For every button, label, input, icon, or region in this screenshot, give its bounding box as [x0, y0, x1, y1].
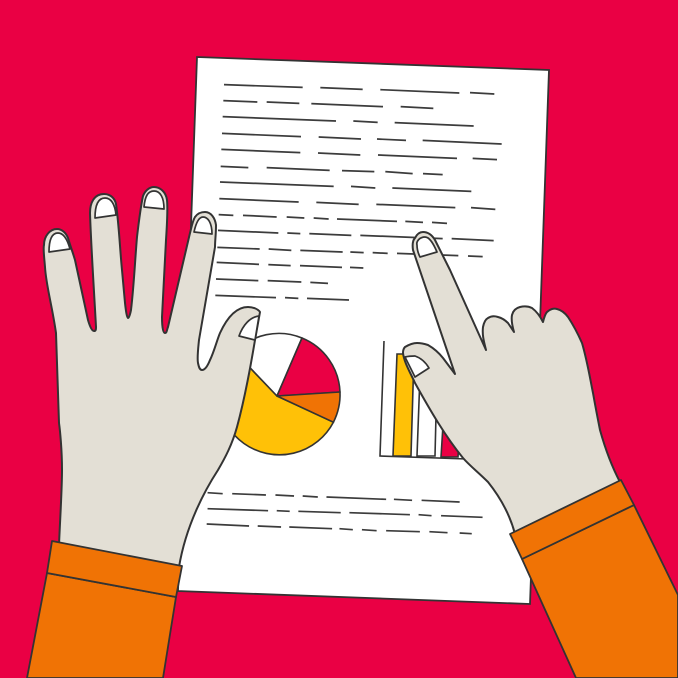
- cuff: [510, 480, 634, 559]
- sleeve body: [522, 505, 678, 678]
- right sleeve: [510, 480, 678, 678]
- panel: paper document: [178, 57, 549, 604]
- nail: thumb: [405, 356, 429, 377]
- left sleeve: [27, 541, 182, 678]
- text block: upper lines: [215, 85, 502, 300]
- bar chart: [380, 341, 467, 459]
- cuff: [47, 541, 182, 597]
- text block: lower lines: [207, 493, 483, 534]
- nail: middle finger: [144, 191, 164, 209]
- bar: white: [417, 375, 437, 456]
- left hand outline: [44, 187, 260, 567]
- pie slice: white: [235, 333, 302, 396]
- sleeve body: [27, 573, 176, 678]
- pie slice: red: [277, 338, 340, 396]
- bar: red: [441, 425, 460, 457]
- icon: left hand: [44, 187, 260, 567]
- pie slice: yellow: [218, 352, 333, 455]
- icon: right hand: [403, 232, 620, 534]
- nail: pinky: [49, 233, 70, 252]
- pie chart: [218, 333, 340, 455]
- nail: index finger: [417, 237, 437, 257]
- nail: index finger: [194, 217, 212, 234]
- nail: thumb: [239, 316, 259, 340]
- chart axes: [380, 341, 467, 459]
- right hand outline: [403, 232, 620, 534]
- nail: ring finger: [95, 198, 116, 218]
- pie slice: orange: [277, 392, 340, 422]
- bar: yellow: [393, 354, 414, 456]
